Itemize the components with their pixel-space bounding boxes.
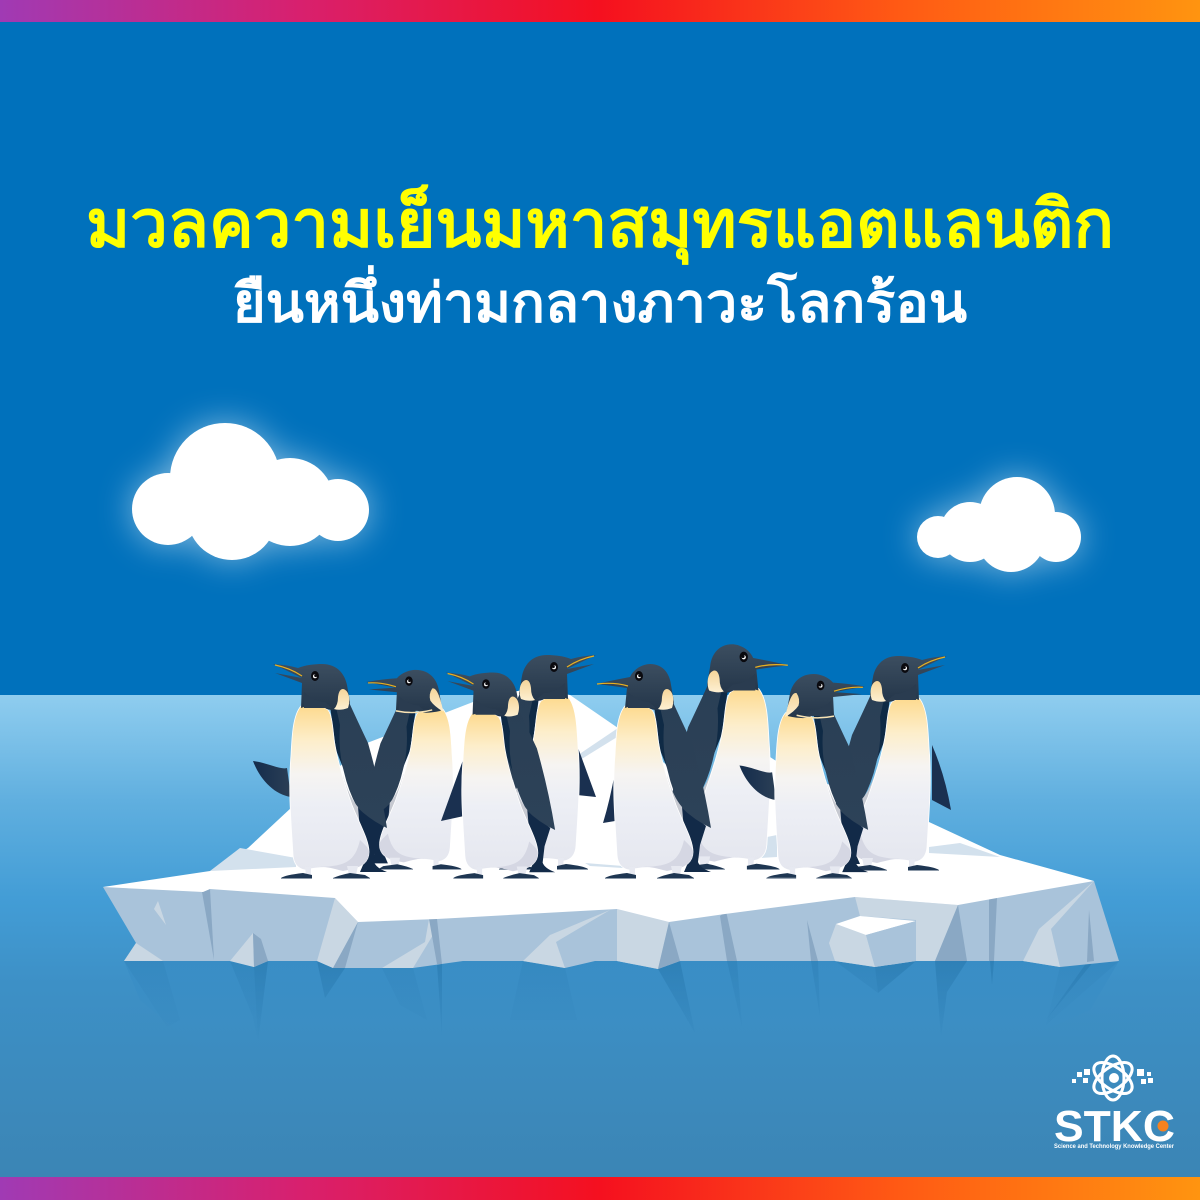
sky background bbox=[0, 0, 1200, 700]
logo orange dot bbox=[1158, 1120, 1168, 1132]
penguin 1 bbox=[253, 664, 387, 878]
penguins bbox=[253, 644, 951, 878]
bottom gradient bar bbox=[0, 1177, 1200, 1200]
sea bbox=[0, 695, 1200, 1177]
penguin 4 bbox=[482, 655, 596, 870]
iceberg top surface and snow hill bbox=[103, 688, 1094, 922]
logo pixel squares bbox=[1072, 1069, 1153, 1084]
title bbox=[86, 184, 1114, 334]
penguin 2 bbox=[363, 670, 461, 869]
top gradient bar bbox=[0, 0, 1200, 22]
iceberg side bbox=[103, 881, 1119, 969]
penguin 7 bbox=[739, 674, 868, 878]
cloud left bbox=[132, 423, 369, 560]
penguin 6 bbox=[668, 644, 789, 870]
iceberg reflection bbox=[124, 961, 1119, 1050]
penguin 8 bbox=[833, 656, 951, 870]
iceberg bbox=[103, 688, 1119, 969]
iceberg facets bbox=[124, 881, 1094, 969]
logo wordmark: STKC bbox=[1054, 1102, 1175, 1151]
cloud right bbox=[917, 477, 1081, 572]
penguin 3 bbox=[441, 673, 555, 878]
penguin 5 bbox=[596, 664, 711, 878]
logo tagline: Science and Technology Knowledge Center bbox=[1054, 1144, 1175, 1150]
title line 1: มวลความเย็นมหาสมุทรแอตแลนติก bbox=[86, 184, 1114, 266]
logo atom icon bbox=[1089, 1056, 1137, 1100]
ice block bbox=[836, 916, 916, 935]
STKC logo bbox=[1054, 1056, 1175, 1151]
snow shading bbox=[210, 728, 1000, 871]
title line 2: ยืนหนึ่งท่ามกลางภาวะโลกร้อน bbox=[233, 264, 967, 334]
